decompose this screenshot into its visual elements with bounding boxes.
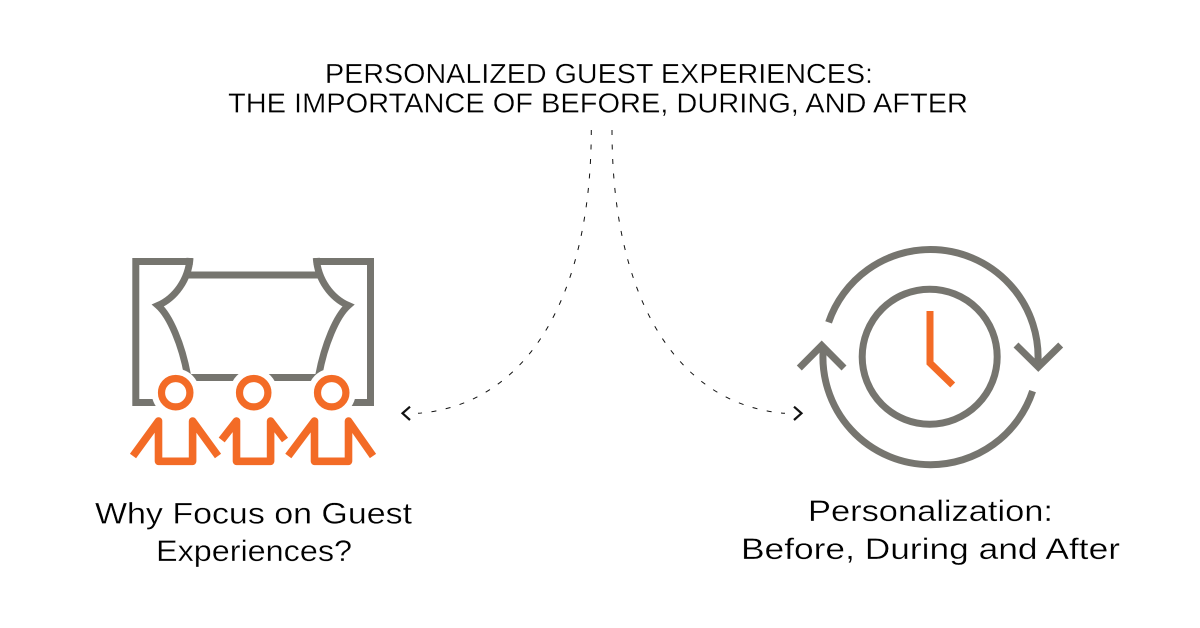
arrow: dashed curve to personalization [612, 130, 802, 420]
cycle arrow: lower [799, 346, 1033, 465]
title: PERSONALIZED GUEST EXPERIENCES: [325, 58, 873, 89]
icon: theater with audience [133, 258, 373, 461]
clock face [862, 289, 997, 424]
label: why focus on guest experiences [95, 498, 413, 568]
icon: clock with cycle arrows [799, 250, 1061, 465]
label: personalization before during and after: Before, During and After [741, 533, 1120, 566]
stage frame and curtains [136, 258, 370, 402]
title [228, 58, 968, 119]
cycle arrow: upper [829, 250, 1061, 367]
label: personalization before during and after [741, 495, 1120, 566]
audience bodies [133, 421, 373, 461]
label: why focus on guest experiences: Why Focus on Guest [95, 498, 413, 530]
clock hands [930, 311, 953, 385]
arrow: dashed curve to guest experiences [402, 130, 591, 420]
white halos around heads [152, 369, 356, 417]
label: why focus on guest experiences: Experiences? [156, 535, 352, 568]
audience heads [162, 378, 346, 407]
label: personalization before during and after: Personalization: [808, 495, 1053, 528]
title: THE IMPORTANCE OF BEFORE, DURING, AND AFTER [228, 88, 968, 119]
